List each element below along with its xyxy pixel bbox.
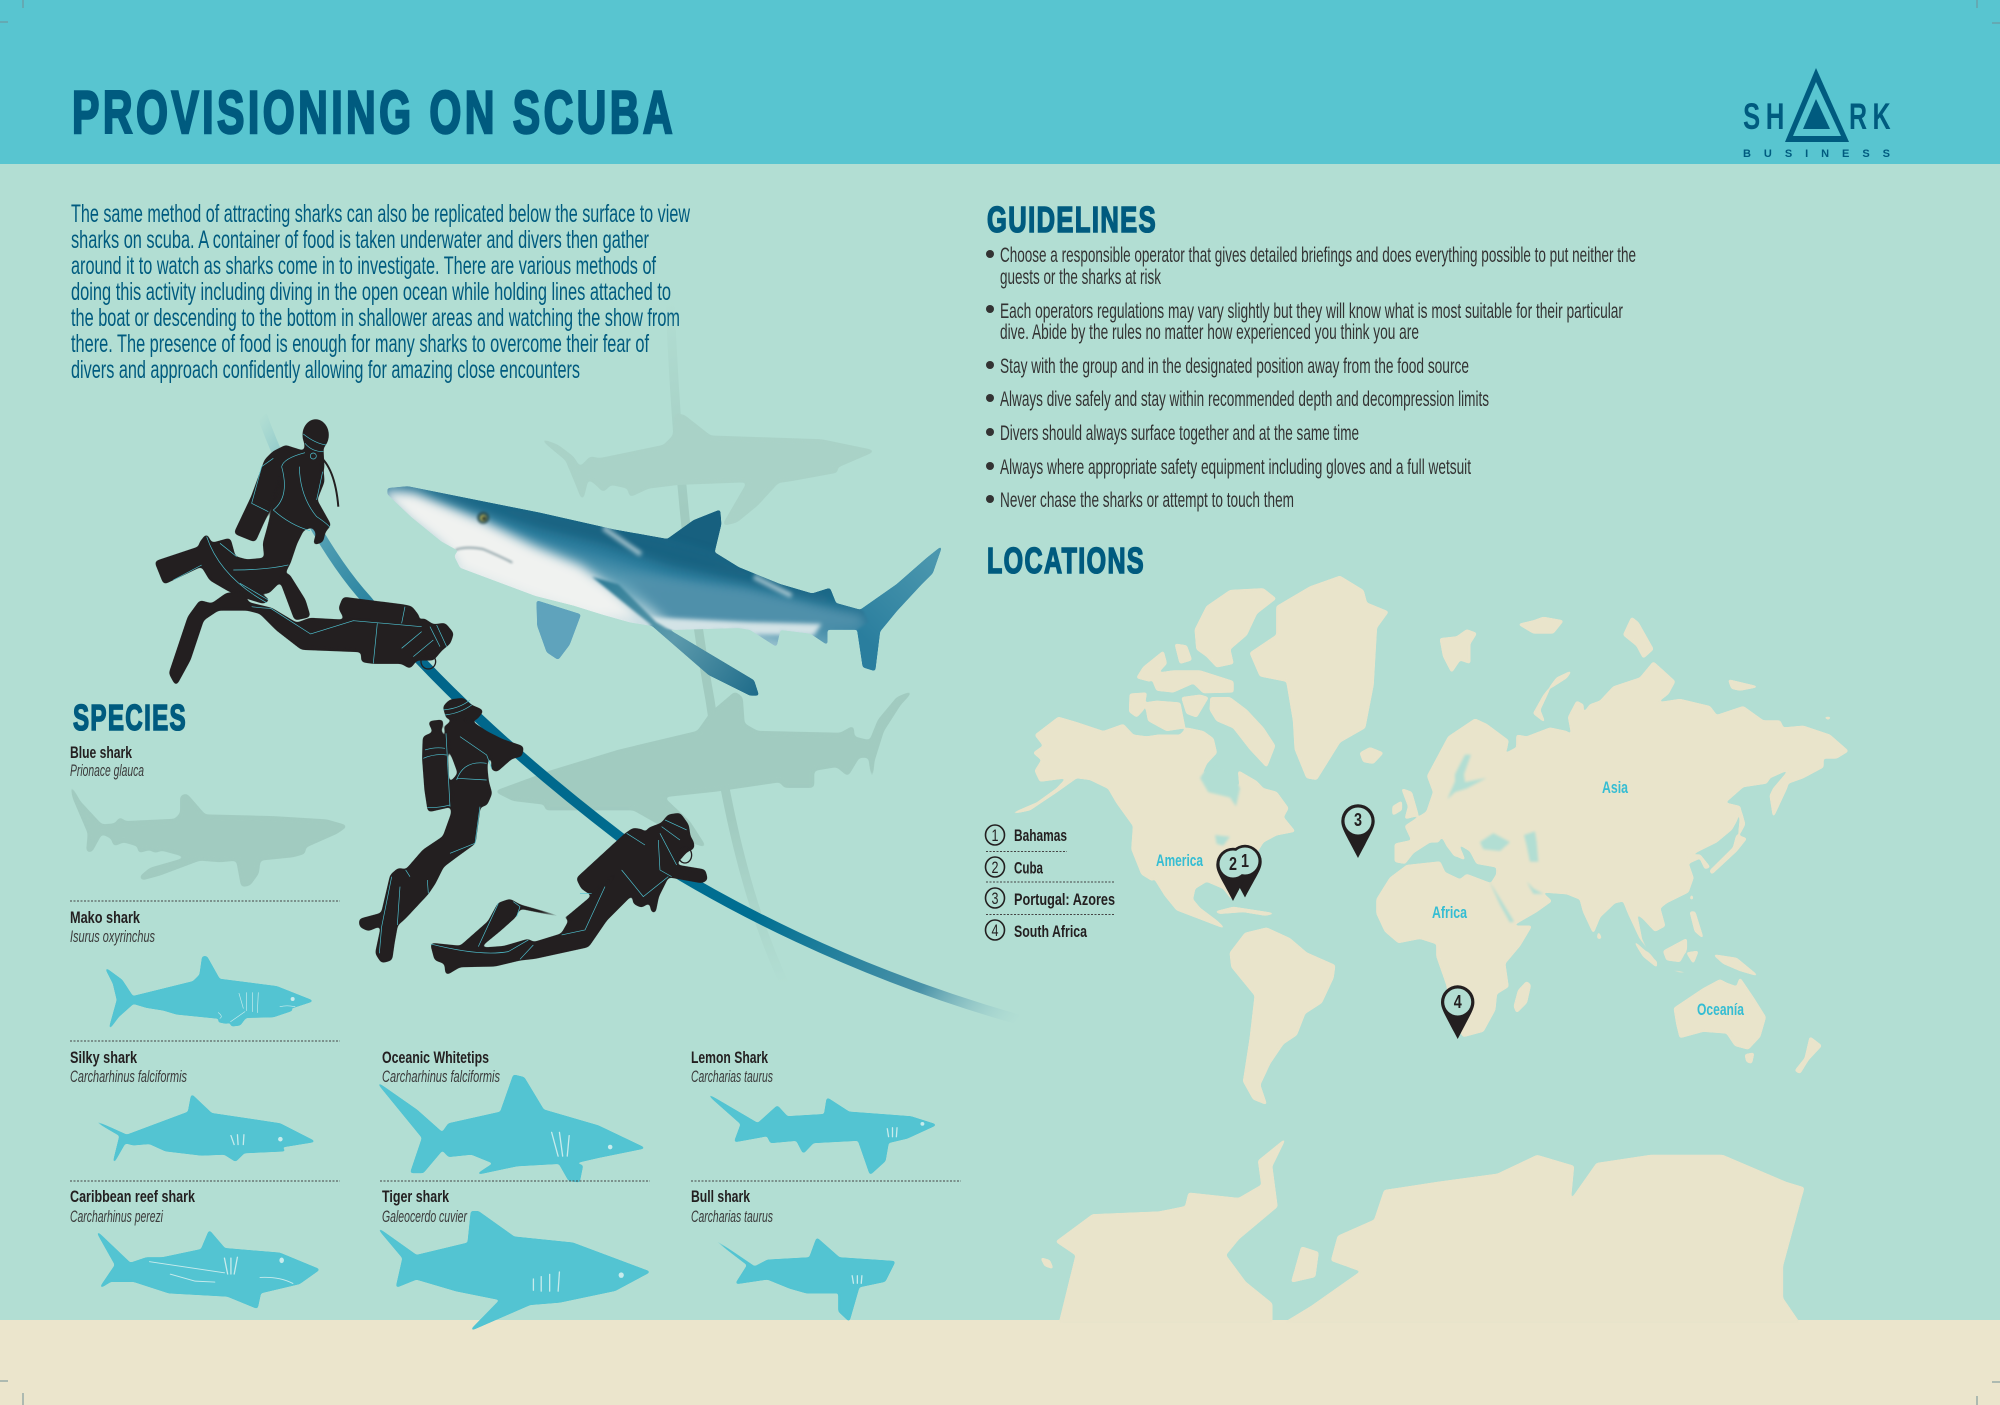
guidelines list: Always where appropriate safety equipment including gloves and a full wetsuit — [1000, 456, 1471, 479]
species: bull shark: Bull shark — [691, 1187, 750, 1206]
species: tiger shark — [379, 1187, 649, 1330]
map pins 1 and 2 — [1216, 845, 1262, 901]
heading: guidelines: GUIDELINES — [987, 199, 1157, 240]
species: blue shark: Prionace glauca — [70, 761, 144, 780]
intro paragraph — [71, 200, 691, 384]
locations legend: Cuba — [1014, 858, 1043, 878]
species: caribbean reef shark — [70, 1187, 319, 1308]
map pin 4 — [1441, 985, 1474, 1039]
logo: shark business: RK — [1849, 96, 1896, 137]
guidelines list: Always dive safely and stay within recommended depth and decompression limits — [1000, 388, 1489, 411]
locations legend: South Africa — [1014, 922, 1087, 941]
continent labels: Oceanía — [1697, 1000, 1744, 1019]
heading: locations: LOCATIONS — [987, 540, 1145, 581]
eurasia africa oceania — [1377, 617, 1848, 1074]
species: lemon shark — [691, 1048, 935, 1174]
header band — [0, 0, 2000, 164]
species: oceanic whitetips: Carcharhinus falciformis — [382, 1067, 500, 1086]
intro paragraph: divers and approach confidently allowing for amazing close encounters — [71, 356, 580, 384]
species: blue shark — [69, 743, 347, 887]
species: tiger shark: Tiger shark — [382, 1187, 449, 1206]
species: bull shark — [691, 1187, 894, 1320]
species: tiger shark: Galeocerdo cuvier — [382, 1207, 468, 1226]
heading: species: SPECIES — [73, 697, 187, 738]
guidelines list: Stay with the group and in the designated position away from the food source — [1000, 355, 1469, 378]
map pin 3 — [1341, 804, 1375, 858]
diver 3 — [359, 698, 523, 963]
species: caribbean reef shark: Caribbean reef shark — [70, 1187, 195, 1206]
intro paragraph: around it to watch as sharks come in to investigate. There are various methods of — [71, 252, 656, 280]
map pins 1 and 2: 2 — [1229, 854, 1237, 874]
continent labels: Asia — [1602, 778, 1628, 797]
locations legend: Bahamas — [1014, 826, 1067, 845]
locations legend: Portugal: Azores — [1014, 890, 1115, 909]
americas and greenland — [1010, 576, 1388, 1105]
shadow shark upper — [537, 413, 876, 526]
species: lemon shark: Carcharias taurus — [691, 1067, 773, 1086]
map pin 4: 4 — [1454, 992, 1462, 1012]
logo: shark business — [1743, 68, 1896, 160]
species: silky shark: Silky shark — [70, 1048, 137, 1067]
intro paragraph: sharks on scuba. A container of food is taken underwater and divers then gather — [71, 226, 649, 254]
world map — [1010, 576, 1848, 1322]
locations legend: 2 — [992, 858, 998, 877]
antarctica — [1041, 1139, 1804, 1322]
guidelines list: Each operators regulations may vary slightly but they will know what is most suitable for their particular — [1000, 300, 1623, 323]
species: lemon shark: Lemon Shark — [691, 1048, 768, 1067]
title: PROVISIONING ON SCUBA — [72, 79, 676, 146]
shadow rope — [670, 300, 785, 985]
diver 4 — [431, 813, 707, 975]
locations legend: 3 — [992, 889, 998, 908]
locations legend — [986, 825, 1115, 941]
guidelines list: dive. Abide by the rules no matter how experienced you think you are — [1000, 321, 1419, 344]
species: oceanic whitetips — [379, 1048, 644, 1182]
guidelines list: Choose a responsible operator that gives detailed briefings and does everything possible to put neither the — [1000, 244, 1636, 267]
locations legend: 1 — [992, 826, 998, 845]
intro paragraph: doing this activity including diving in the open ocean while holding lines attached to — [71, 278, 671, 306]
intro paragraph: The same method of attracting sharks can also be replicated below the surface to view — [71, 200, 691, 228]
map pins 1 and 2: 1 — [1241, 851, 1249, 871]
guidelines list: Divers should always surface together and at the same time — [1000, 422, 1359, 445]
species: caribbean reef shark: Carcharhinus perezi — [70, 1207, 164, 1226]
species: mako shark: Isurus oxyrinchus — [70, 927, 155, 946]
species: bull shark: Carcharias taurus — [691, 1207, 773, 1226]
shadow shark lower — [494, 690, 915, 848]
blue shark photo — [385, 485, 942, 695]
guidelines list: guests or the sharks at risk — [1000, 266, 1161, 289]
guidelines list — [986, 244, 1636, 512]
logo: shark business: SH — [1743, 96, 1790, 137]
species: silky shark — [70, 1048, 314, 1162]
guidelines list: Never chase the sharks or attempt to touch them — [1000, 489, 1294, 512]
locations legend: 4 — [992, 921, 998, 940]
map pin 3: 3 — [1354, 810, 1362, 830]
rope — [262, 415, 1020, 1020]
logo: shark business: BUSINESS — [1743, 148, 1890, 160]
continent labels: Africa — [1432, 903, 1467, 922]
diver 2 — [169, 592, 453, 686]
species: blue shark: Blue shark — [70, 743, 132, 762]
intro paragraph: the boat or descending to the bottom in shallower areas and watching the show from — [71, 304, 680, 332]
species: silky shark: Carcharhinus falciformis — [70, 1067, 187, 1086]
intro paragraph: there. The presence of food is enough for many sharks to overcome their fear of — [71, 330, 649, 358]
continent labels: America — [1156, 851, 1203, 870]
continent labels — [1156, 778, 1744, 1019]
species: oceanic whitetips: Oceanic Whitetips — [382, 1048, 489, 1067]
beige bottom band — [0, 1320, 2000, 1405]
species: mako shark — [70, 908, 313, 1029]
diver 1 — [155, 420, 338, 658]
species: mako shark: Mako shark — [70, 908, 140, 927]
